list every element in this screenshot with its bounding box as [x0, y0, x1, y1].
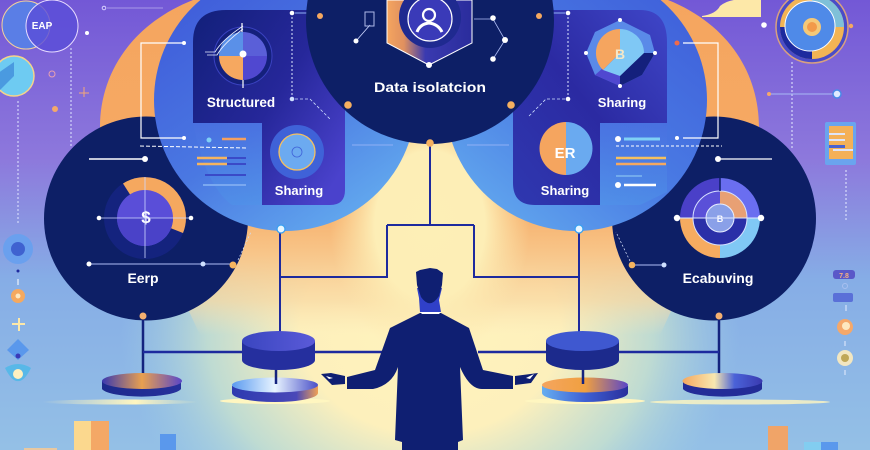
- network nodes: [317, 12, 542, 109]
- dashed and bracket connectors: [140, 11, 393, 148]
- segmented pie chart: [584, 18, 657, 88]
- icon: target dial: [776, 0, 853, 63]
- right hand: [515, 373, 538, 385]
- panel: right dark circle: [612, 116, 816, 320]
- floor shadows: [42, 398, 830, 404]
- icon: ERP venn circles: EAP: [32, 21, 53, 32]
- label: Sharing: Sharing: [275, 183, 323, 198]
- panel: left dark circle ERP: [44, 116, 251, 320]
- bracket and dashed connectors: [467, 11, 722, 146]
- disk: right upper: [546, 331, 619, 370]
- label: Data isolatcion: Data isolatcion: [374, 79, 486, 95]
- right markers: [761, 22, 846, 220]
- icon: sharing badge: [270, 125, 324, 179]
- label: Structured: Structured: [207, 95, 275, 110]
- connector lines and nodes: [86, 156, 251, 268]
- pie chart: [205, 23, 272, 88]
- connector end nodes: [140, 139, 722, 320]
- ERP donut chart: $: [141, 208, 151, 227]
- label: Sharing: Sharing: [541, 183, 589, 198]
- disk: far right: [682, 373, 762, 397]
- icon: note card: [825, 122, 856, 165]
- orange halo: [100, 0, 759, 360]
- disk: far left: [102, 373, 182, 397]
- panel: top dark circle data isolation: [306, 0, 554, 144]
- dark inner panel: [193, 10, 345, 205]
- suit body and arms: [347, 313, 513, 450]
- label: Eerp: Eerp: [127, 270, 159, 286]
- panel: right blue circle: [445, 0, 722, 231]
- segmented pie chart: B: [615, 46, 625, 62]
- label: Sharing: Sharing: [598, 95, 646, 110]
- lighter text-lines panel: [193, 123, 262, 205]
- disk: left lower: [232, 368, 318, 402]
- neck highlight: [417, 288, 442, 312]
- disk: left upper: [242, 331, 315, 370]
- connector lines and nodes: [616, 156, 772, 268]
- icon: ER badge: ER: [555, 145, 576, 162]
- icon: cloud: [702, 0, 761, 17]
- icon: ER badge: [540, 122, 592, 175]
- ERP donut chart: [104, 177, 186, 259]
- donut chart: [680, 178, 760, 258]
- shield icon: [387, 0, 472, 68]
- dark inner panel: [513, 10, 667, 205]
- bottom bars: right: [768, 426, 838, 450]
- right icon column: 7.8: [839, 273, 849, 280]
- right icon column: [833, 270, 855, 375]
- text lines block: [615, 136, 666, 188]
- bottom bars: left: [24, 421, 176, 450]
- disk: right lower: [542, 368, 628, 402]
- connector tree: [143, 146, 719, 378]
- left icon column: [3, 234, 33, 381]
- icon: ERP venn circles: [2, 0, 78, 52]
- panel: left blue circle: [140, 0, 416, 231]
- person silhouette: [321, 268, 538, 450]
- left hand: [321, 373, 345, 385]
- head and hair: [416, 268, 443, 303]
- left markers: [18, 6, 163, 225]
- icon: left pie badge: [0, 56, 34, 96]
- label: Ecabuving: Ecabuving: [683, 270, 753, 286]
- donut chart: B: [717, 214, 724, 224]
